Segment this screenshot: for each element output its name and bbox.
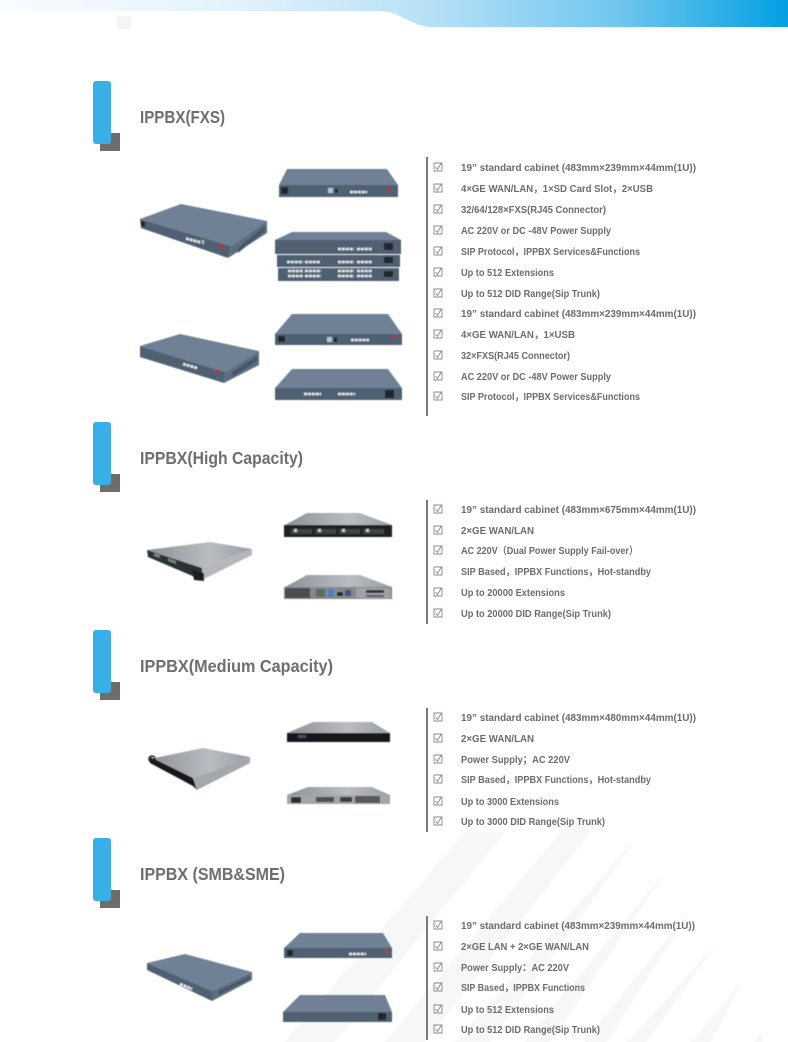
specification list: FXS: 4×GE WAN/LAN，1×SD Card Slot，2×USB bbox=[461, 184, 653, 195]
heading: SMB&SME: IPPBX (SMB&SME) bbox=[140, 864, 285, 884]
specification list: FXS: AC 220V or DC -48V Power Supply bbox=[461, 372, 611, 383]
server: Medium Capacity rear bbox=[287, 787, 390, 804]
device: SMB perspective bbox=[147, 954, 252, 1001]
device: 32 FXS front bbox=[275, 314, 402, 345]
specification list: FXS: SIP Protocol，IPPBX Services&Functions bbox=[461, 247, 640, 258]
specification list: High Capacity: Up to 20000 DID Range(Sip Trunk) bbox=[461, 609, 611, 620]
specification list: FXS: 32/64/128×FXS(RJ45 Connector) bbox=[461, 205, 606, 216]
section marker: Medium Capacity bbox=[93, 630, 120, 700]
divider rule: High Capacity bbox=[426, 500, 428, 624]
specification list: SMB&SME: 19” standard cabinet (483mm×239mm×44mm(1U)) bbox=[461, 921, 695, 932]
device: SMB rear bbox=[283, 995, 392, 1022]
server: Medium Capacity perspective bbox=[149, 748, 250, 790]
section marker: High Capacity bbox=[93, 422, 120, 492]
specification list: FXS: 4×GE WAN/LAN，1×USB bbox=[461, 330, 575, 341]
section marker: FXS bbox=[93, 81, 120, 151]
specification list: FXS bbox=[434, 163, 696, 403]
specification list: High Capacity: Up to 20000 Extensions bbox=[461, 588, 565, 599]
specification list: FXS: 32×FXS(RJ45 Connector) bbox=[461, 351, 570, 362]
specification list: High Capacity: 19” standard cabinet (483mm×675mm×44mm(1U)) bbox=[461, 505, 696, 516]
specification list: Medium Capacity: 2×GE WAN/LAN bbox=[461, 734, 534, 745]
specification list: SMB&SME bbox=[434, 921, 695, 1036]
header gradient band bbox=[0, 0, 788, 27]
devices: High Capacity bbox=[147, 513, 392, 599]
divider rule: FXS bbox=[426, 157, 428, 416]
server: High Capacity rear bbox=[284, 575, 392, 599]
small header square bbox=[117, 16, 131, 29]
device: FXS front 1 bbox=[279, 169, 398, 197]
divider rule: Medium Capacity bbox=[426, 708, 428, 832]
specification list: FXS: 19” standard cabinet (483mm×239mm×44mm(1U)) bbox=[461, 309, 696, 320]
section: IPPBX(Medium Capacity) bbox=[93, 630, 696, 832]
specification list: High Capacity: SIP Based，IPPBX Functions，Hot-standby bbox=[461, 567, 651, 578]
specification list: FXS: Up to 512 Extensions bbox=[461, 268, 554, 279]
server: High Capacity perspective bbox=[147, 542, 252, 581]
devices: Medium Capacity bbox=[149, 722, 390, 804]
divider rule: SMB&SME bbox=[426, 916, 428, 1040]
heading: FXS: IPPBX(FXS) bbox=[140, 107, 225, 127]
specification list: FXS: SIP Protocol，IPPBX Services&Functions bbox=[461, 392, 640, 403]
devices: FXS bbox=[140, 169, 402, 400]
devices: SMB&SME bbox=[147, 933, 392, 1022]
specification list: High Capacity bbox=[434, 505, 696, 620]
specification list: SMB&SME: Up to 512 DID Range(Sip Trunk) bbox=[461, 1025, 600, 1036]
specification list: SMB&SME: 2×GE LAN + 2×GE WAN/LAN bbox=[461, 942, 589, 953]
background diagonal stripes bbox=[285, 825, 762, 1042]
specification list: Medium Capacity: Power Supply；AC 220V bbox=[461, 755, 570, 766]
specification list: SMB&SME: Up to 512 Extensions bbox=[461, 1005, 554, 1016]
device: 32 FXS perspective bbox=[140, 334, 259, 383]
specification list: Medium Capacity: Up to 3000 Extensions bbox=[461, 797, 559, 808]
specification list: SMB&SME: SIP Based，IPPBX Functions bbox=[461, 983, 585, 994]
device: FXS large perspective bbox=[140, 204, 267, 258]
device: FXS stacked units bbox=[275, 232, 401, 281]
specification list: Medium Capacity bbox=[434, 713, 696, 828]
specification list: Medium Capacity: SIP Based，IPPBX Functions，Hot-standby bbox=[461, 775, 651, 786]
section: IPPBX(FXS) bbox=[93, 81, 696, 416]
server: High Capacity front bbox=[284, 513, 392, 537]
specification list: FXS: Up to 512 DID Range(Sip Trunk) bbox=[461, 289, 600, 300]
specification list: FXS: 19” standard cabinet (483mm×239mm×44mm(1U)) bbox=[461, 163, 696, 174]
specification list: FXS: AC 220V or DC -48V Power Supply bbox=[461, 226, 611, 237]
specification list: Medium Capacity: 19” standard cabinet (483mm×480mm×44mm(1U)) bbox=[461, 713, 696, 724]
section: IPPBX (SMB&SME) bbox=[93, 838, 695, 1040]
specification list: Medium Capacity: Up to 3000 DID Range(Sip Trunk) bbox=[461, 817, 605, 828]
section marker: SMB&SME bbox=[93, 838, 120, 908]
heading: Medium Capacity: IPPBX(Medium Capacity) bbox=[140, 656, 333, 676]
specification list: High Capacity: 2×GE WAN/LAN bbox=[461, 526, 534, 537]
section: IPPBX(High Capacity) bbox=[93, 422, 696, 624]
heading: High Capacity: IPPBX(High Capacity) bbox=[140, 448, 303, 468]
device: SMB front bbox=[284, 933, 392, 958]
device: 32 FXS rear bbox=[275, 369, 402, 400]
server: Medium Capacity front bbox=[287, 722, 390, 742]
specification list: SMB&SME: Power Supply：AC 220V bbox=[461, 963, 569, 974]
specification list: High Capacity: AC 220V（Dual Power Supply Fail-over） bbox=[461, 545, 638, 557]
